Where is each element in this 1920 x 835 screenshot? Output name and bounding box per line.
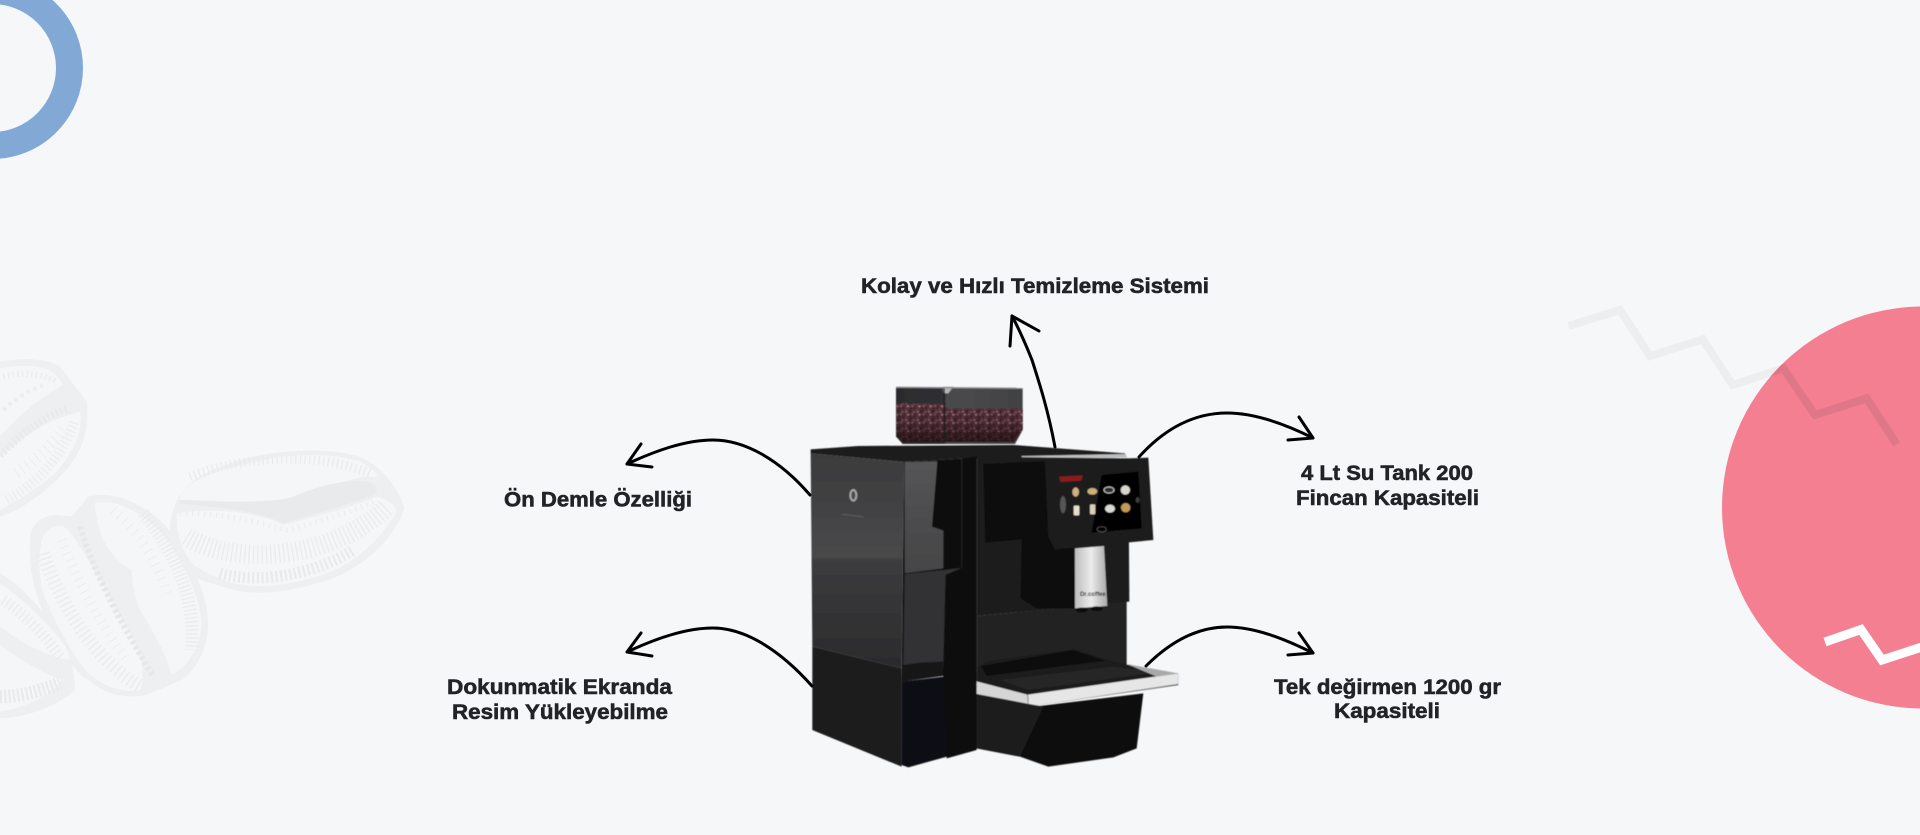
water tank front panel (902, 459, 962, 682)
arrow: pre-brew (627, 440, 810, 495)
black side box (983, 461, 1051, 543)
label: water tank: Fincan Kapasiteli (1296, 487, 1479, 510)
decorative red circle (1722, 306, 1920, 708)
label: grinder capacity: Kapasiteli (1334, 700, 1440, 723)
bean: right (170, 451, 404, 593)
bean: lower left (0, 573, 75, 718)
side emblem (842, 489, 863, 517)
drip tray (977, 649, 1178, 707)
label: cleaning system: Kolay ve Hızlı Temizleme Sistemi (861, 275, 1209, 298)
label: pre-brew: Ön Demle Özelliği (504, 488, 692, 512)
control panel (1045, 458, 1153, 549)
product: coffee machine (811, 387, 1178, 767)
label: water tank (1296, 462, 1479, 510)
drip box (977, 693, 1143, 767)
label: touch screen image upload (447, 676, 672, 724)
machine top (811, 445, 1127, 462)
base (812, 647, 902, 767)
decorative grey zigzag (1568, 310, 1897, 444)
decorative zigzag over red circle (1770, 364, 1900, 446)
arrow: cleaning system (1010, 316, 1055, 447)
label: touch screen image upload: Dokunmatik Ekranda (447, 676, 672, 699)
label: grinder capacity: Tek değirmen 1200 gr (1274, 676, 1501, 699)
bean: middle (30, 495, 208, 697)
spout body (1021, 537, 1075, 608)
decorative ring top left (0, 0, 70, 146)
illustration: coffee beans watermark (0, 359, 404, 718)
silver spout: Dr.coffee (1080, 592, 1106, 598)
water tank side panel (811, 453, 904, 668)
bean: top left (0, 359, 87, 517)
arrow: water tank (1139, 413, 1313, 457)
bean hopper (896, 387, 1023, 444)
arrow: touch screen (627, 628, 812, 686)
decorative white zigzag (1825, 630, 1920, 660)
arrow: grinder (1146, 627, 1313, 666)
silver spout (1075, 546, 1107, 612)
label: grinder capacity (1274, 676, 1501, 723)
back wall (977, 457, 1129, 616)
label: touch screen image upload: Resim Yükleyebilme (452, 701, 668, 724)
centre column (943, 457, 977, 758)
lower wall (977, 602, 1127, 668)
label: water tank: 4 Lt Su Tank 200 (1301, 462, 1473, 485)
